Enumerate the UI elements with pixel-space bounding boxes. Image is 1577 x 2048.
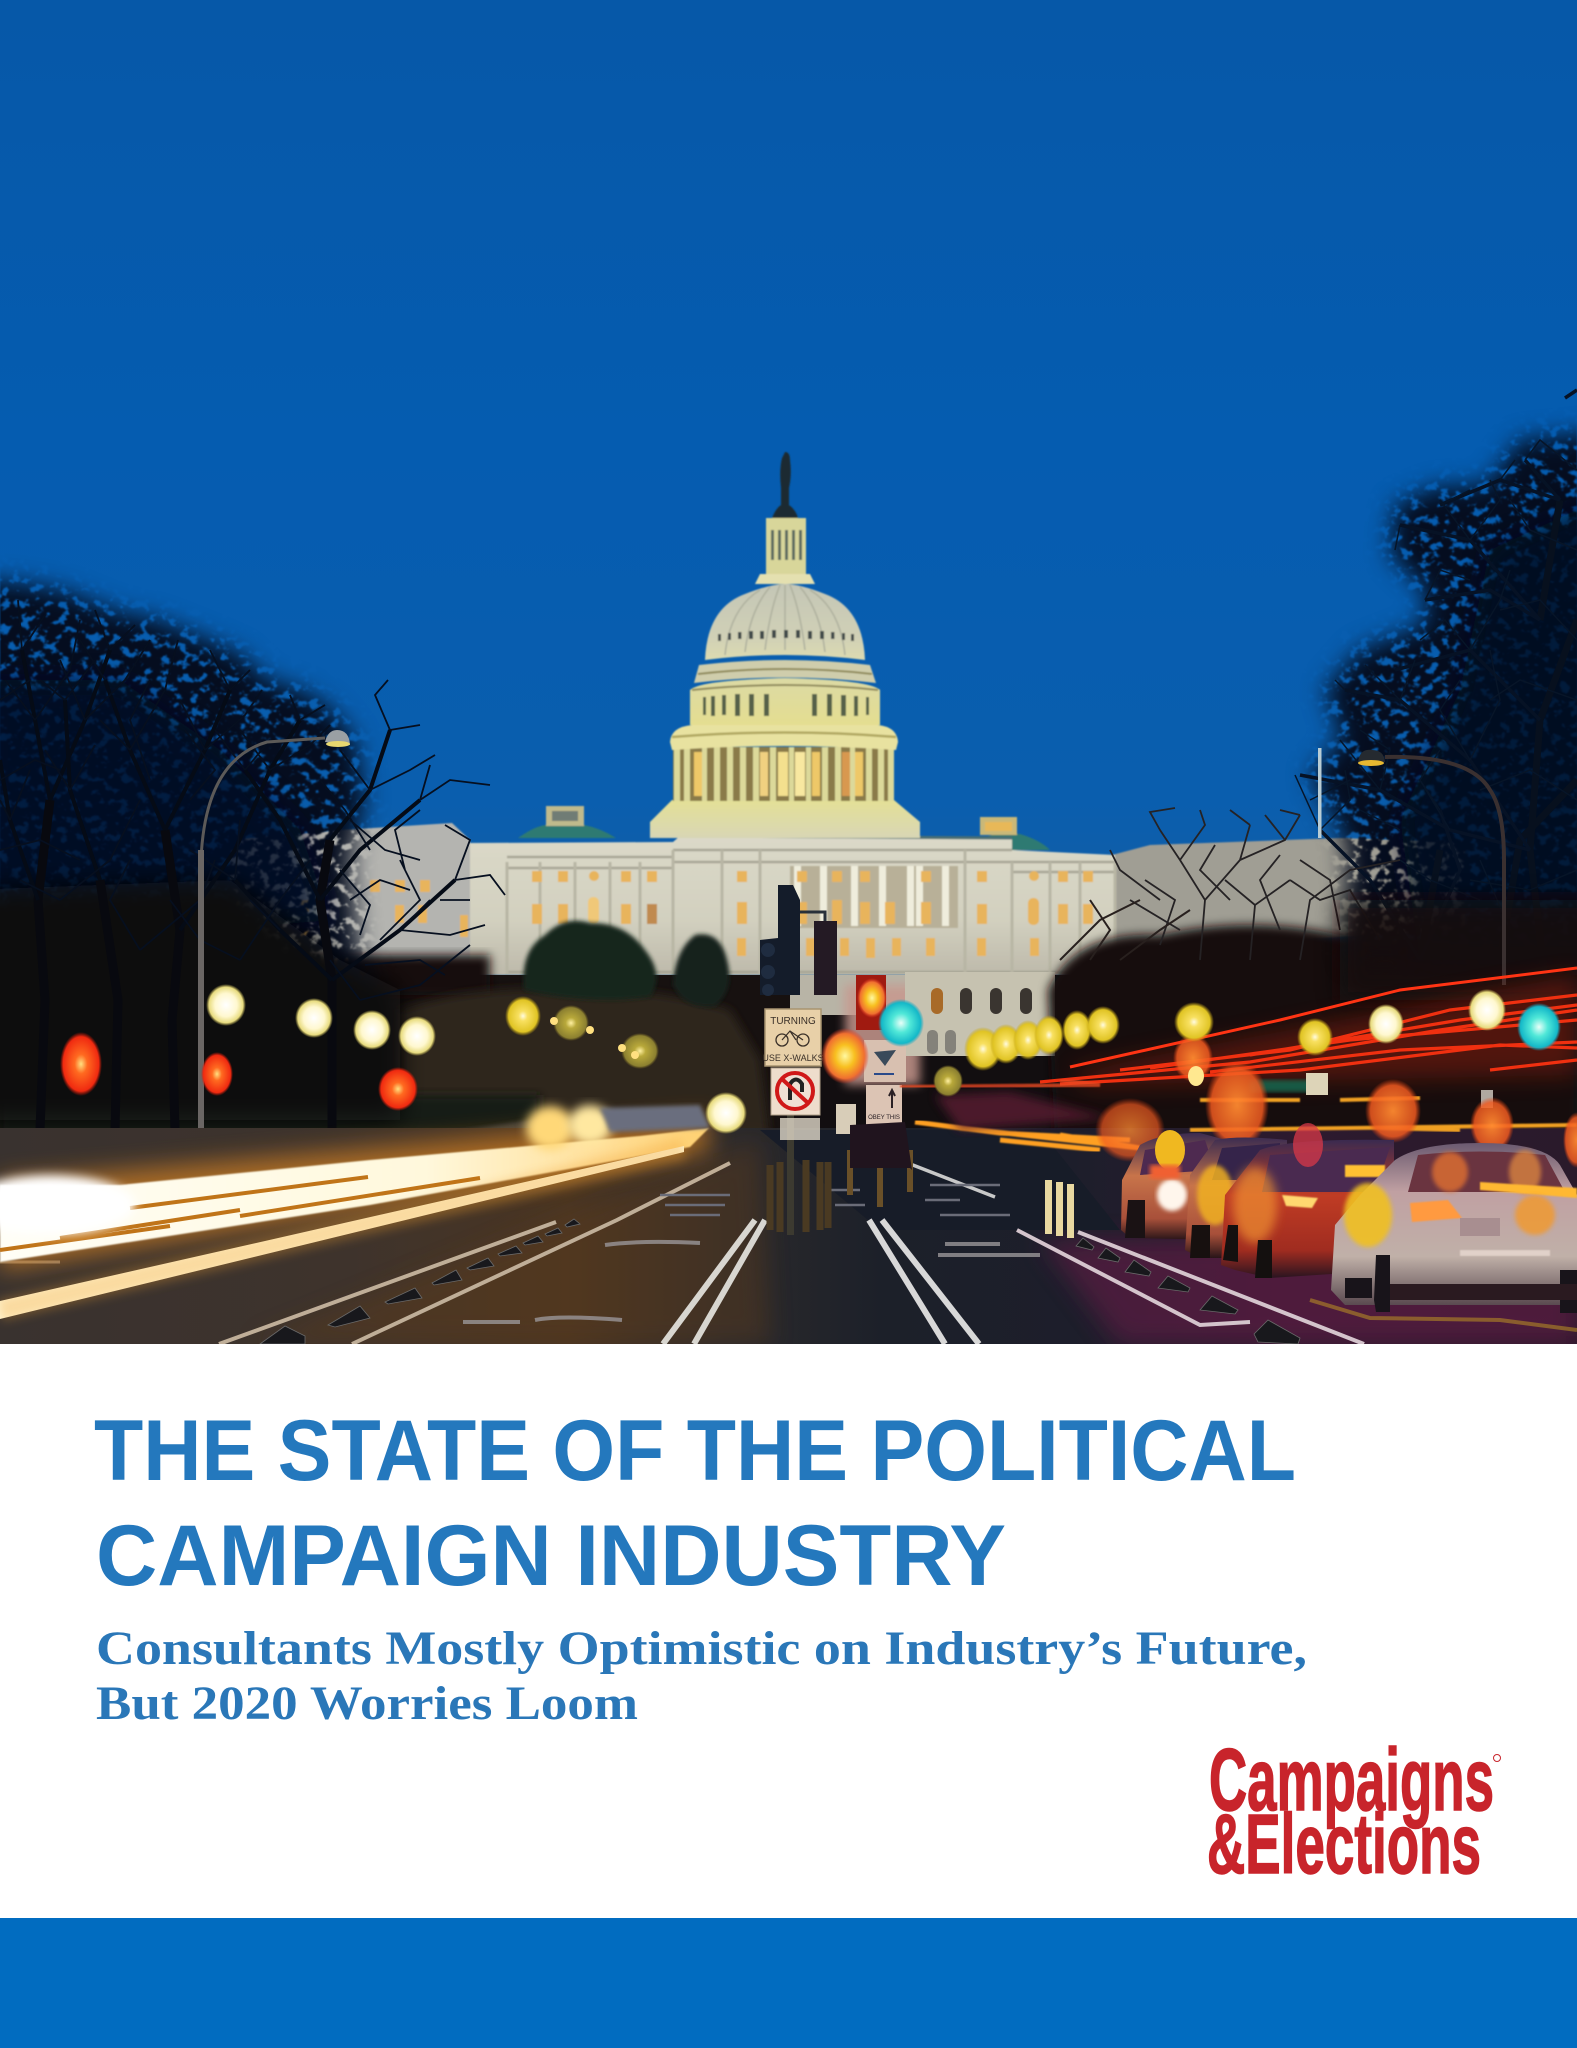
lit windows xyxy=(210,871,1093,958)
left solid core xyxy=(0,680,330,950)
subtitle: Consultants Mostly Optimistic on Industry’s Future, xyxy=(96,1622,1307,1675)
main block xyxy=(470,836,1115,975)
dark ground band right xyxy=(1055,975,1577,1000)
sign: turning use x-walks: TURNING xyxy=(770,1016,816,1027)
crosswalk dashes xyxy=(660,1185,1010,1215)
subtitle: But 2020 Worries Loom xyxy=(96,1677,638,1730)
left bare trees xyxy=(0,580,505,1130)
far trees and ground xyxy=(0,917,1577,1128)
far dark car xyxy=(850,1122,912,1170)
sign: thru obey this signal xyxy=(866,1085,902,1125)
dome ribs xyxy=(725,585,845,655)
sign: thru obey this signal: OBEY THIS xyxy=(868,1115,900,1121)
lower trail xyxy=(0,1146,684,1319)
entablature ring xyxy=(670,725,898,750)
lane lines right xyxy=(1017,1230,1364,1344)
orange bokeh discs xyxy=(1095,1034,1577,1168)
traffic signal and signs xyxy=(760,885,912,1235)
left small dome xyxy=(518,806,616,838)
sign: turning use x-walks: USE X-WALKS xyxy=(762,1053,824,1063)
lane signs xyxy=(1306,1073,1328,1095)
footer band xyxy=(0,1918,1577,2048)
dome oculi xyxy=(718,630,854,641)
far west wing xyxy=(230,823,470,975)
right trunks xyxy=(1420,500,1577,980)
bright oncoming headlight xyxy=(705,1092,747,1134)
hero photo: US Capitol at dusk xyxy=(0,0,1577,1344)
terrace with arches xyxy=(905,972,1055,1056)
right mottled canopy xyxy=(1310,430,1577,960)
left street lamp xyxy=(201,730,350,1170)
red light trails xyxy=(900,968,1577,1150)
evergreen trees xyxy=(523,921,656,1000)
left headlight flare xyxy=(0,1175,135,1235)
flagpole xyxy=(1318,748,1322,838)
tholos xyxy=(755,574,815,584)
right bare trees xyxy=(1060,390,1577,1000)
Capitol building xyxy=(210,452,1465,975)
red signal orbs xyxy=(60,1032,418,1111)
statue of freedom xyxy=(772,452,798,518)
upper drum windows xyxy=(703,694,869,716)
right small dome xyxy=(979,816,1050,851)
pole xyxy=(787,1110,794,1235)
main white trail xyxy=(0,1128,709,1262)
logo: Campaigns & Elections xyxy=(1207,1730,1500,1891)
bollards xyxy=(1045,1180,1074,1238)
sign: turning use x-walks xyxy=(762,1009,824,1066)
terrace band behind signs xyxy=(790,975,910,1015)
left grass xyxy=(0,1095,540,1135)
left mottled canopy xyxy=(0,580,380,1010)
left dark lower mass xyxy=(0,880,400,1120)
planters xyxy=(770,1160,828,1232)
title xyxy=(94,1403,1296,1604)
bike lane double lines right xyxy=(869,1220,979,1344)
far cars xyxy=(600,1105,710,1132)
far taillights xyxy=(935,1092,1110,1130)
dome base xyxy=(650,800,920,838)
portico columns xyxy=(790,866,958,928)
peristyle backing xyxy=(673,747,894,801)
lane lines left xyxy=(219,1163,730,1344)
night sky xyxy=(0,0,1577,1000)
dark ground band left xyxy=(380,975,790,1000)
bike symbols xyxy=(463,1242,1040,1322)
pink glow beside terrace xyxy=(845,985,920,1085)
title: THE STATE OF THE POLITICAL xyxy=(94,1403,1296,1499)
title: CAMPAIGN INDUSTRY xyxy=(96,1508,1006,1604)
dark right band at tree base xyxy=(1340,900,1577,1000)
peristyle columns xyxy=(674,747,894,801)
left tree limbs xyxy=(0,650,455,980)
small trees over east wing xyxy=(1110,808,1400,960)
main dome xyxy=(705,584,865,660)
dark backing below skyline xyxy=(790,1015,1055,1128)
car 4 xyxy=(1331,1143,1577,1313)
glowing openings xyxy=(694,752,863,796)
sign: no u-turn xyxy=(771,1068,820,1115)
yellow lamp orbs xyxy=(505,989,1506,1097)
right solid core xyxy=(1400,490,1577,960)
small green signal xyxy=(1188,1066,1204,1086)
soft shadow under west wing xyxy=(313,947,498,975)
trail glow xyxy=(0,1118,709,1270)
left tree twigs xyxy=(0,600,505,1000)
wing pilasters xyxy=(507,850,1115,975)
road xyxy=(0,1128,1577,1344)
right limbs xyxy=(1300,390,1577,960)
car 3 xyxy=(1221,1123,1394,1278)
subtitle xyxy=(96,1622,1307,1730)
roof and cornice lines xyxy=(507,850,1115,972)
car 1 xyxy=(1121,1130,1226,1240)
east far wing xyxy=(1112,838,1465,950)
multicolour signal orb xyxy=(821,1028,869,1084)
cyan signal orbs xyxy=(878,999,1561,1051)
cars queue xyxy=(1121,1123,1577,1313)
green sign streak xyxy=(1250,1080,1320,1092)
brown shrubs xyxy=(400,989,770,1140)
sign: small no u-turn xyxy=(868,1127,896,1155)
small lane sign xyxy=(836,1104,856,1134)
upper drum xyxy=(690,678,880,725)
right twigs xyxy=(1295,440,1577,930)
orange seams xyxy=(0,1177,480,1250)
left tree trunks xyxy=(38,800,332,1130)
right dark trees low xyxy=(1048,925,1577,1140)
bike lane double lines left xyxy=(663,1220,765,1344)
trail lines xyxy=(1070,968,1577,1067)
sign: east arrow xyxy=(864,1040,906,1082)
white street-lamp orbs xyxy=(206,984,436,1056)
red signal and bokeh xyxy=(856,975,886,1030)
right street lamp xyxy=(1358,750,1504,985)
lane bumpers xyxy=(260,1219,1300,1344)
car 2 xyxy=(1185,1138,1287,1258)
left light trails xyxy=(0,1092,747,1319)
signal housing xyxy=(760,885,800,995)
trail glow xyxy=(1070,975,1577,1085)
